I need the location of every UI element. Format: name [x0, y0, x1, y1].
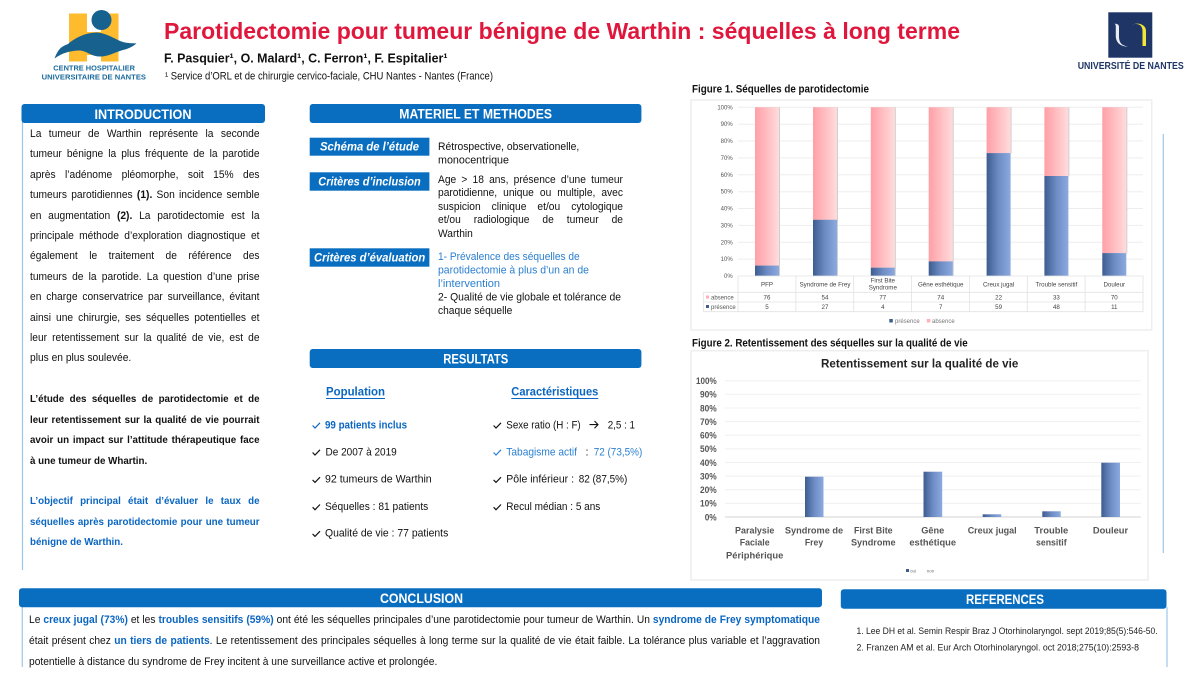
affiliation: ¹ Service d’ORL et de chirurgie cervico-faciale, CHU Nantes - Nantes (France): [165, 70, 493, 82]
list: caracteristiques: 2,5 : 1: [608, 419, 635, 431]
data table: absence: [711, 296, 734, 302]
panel: materiel et methodes: Critères d’évaluation: [314, 251, 425, 265]
y axis labels: 60%: [721, 173, 733, 179]
legend: [906, 568, 935, 574]
data table: Syndrome de Frey: [800, 282, 851, 288]
panel: references: 2. Franzen AM et al. Eur Arch Otorhinolaryngol. oct 2018;275(10):2593-8: [856, 643, 1139, 653]
logo: Université de Nantes: [1078, 12, 1184, 72]
panel: conclusion: potentielle à distance du syndrome de Frey incitent à une surveillance active et prolongée.: [29, 656, 437, 668]
panel: introduction: principale méthode d’exploration diagnostique et: [30, 230, 260, 242]
y axis labels: 50%: [700, 443, 717, 454]
list: caracteristiques: Sexe ratio (H : F): [506, 419, 581, 431]
logo: Université de Nantes: UNIVERSITÉ DE NANTES: [1078, 60, 1184, 72]
y axis labels: 30%: [721, 223, 733, 229]
data table: 70: [1111, 294, 1118, 302]
logo: Centre Hospitalier Universitaire de Nantes: CENTRE HOSPITALIER: [53, 64, 135, 73]
category labels: Périphérique: [726, 550, 783, 561]
category labels: esthétique: [909, 538, 956, 549]
panel: introduction: également le traitement de référence des: [30, 250, 260, 262]
category labels: Gêne: [921, 525, 944, 536]
panel: materiel et methodes: Age > 18 ans, présence d’une tumeur: [438, 174, 623, 186]
panel: materiel et methodes: suspicion clinique et/ou cytologique: [438, 200, 623, 212]
panel: introduction: INTRODUCTION: [94, 107, 192, 122]
panel: references: [841, 589, 1167, 667]
list: population: Qualité de vie : 77 patients: [325, 528, 449, 540]
y axis labels: 0%: [705, 511, 717, 522]
bars: [755, 107, 1127, 276]
data table: 59: [995, 304, 1003, 311]
y axis labels: 30%: [700, 470, 717, 481]
panel: introduction: tumeur bénigne la plus fréquente de la parotide: [30, 148, 260, 160]
title: Parotidectomie pour tumeur bénigne de Warthin : séquelles à long terme: [164, 18, 960, 44]
bars: [805, 463, 1120, 517]
panel: introduction: tumeurs parotidiennes (1). Son incidence semble: [30, 189, 260, 201]
data table: [703, 276, 1143, 312]
panel: resultats: [310, 349, 642, 540]
panel: conclusion: [19, 588, 822, 673]
panel: introduction: avoir un impact sur l’attitude thérapeutique face: [30, 434, 260, 446]
panel: conclusion: Le creux jugal (73%) et les troubles sensitifs (59%) ont été les séquelles principales d’une parotidectomie pour tumeur de Warthin. Un syndrome de Frey symptomatique: [29, 614, 820, 626]
panel: introduction: leur retentissement sur la qualité de vie pourrait: [30, 414, 260, 426]
panel: introduction: La tumeur de Warthin représente la seconde: [30, 128, 260, 140]
data table: PFP: [761, 282, 773, 288]
data table: Creux jugal: [983, 282, 1014, 288]
panel: introduction: L’objectif principal était d’évaluer le taux de: [30, 495, 260, 507]
panel: materiel et methodes: Critères d’inclusion: [318, 175, 421, 189]
data table: présence: [711, 305, 736, 311]
panel: introduction: en augmentation (2). La parotidectomie est la: [30, 210, 260, 222]
list: caracteristiques: Pôle inférieur :: [506, 474, 574, 486]
panel: introduction: bénigne de Warthin.: [30, 536, 123, 548]
y axis labels: 40%: [721, 206, 733, 212]
panel: introduction: plus en plus soulevée.: [30, 352, 131, 364]
data table: 7: [939, 304, 943, 311]
figure 2 heading: Figure 2. Retentissement des séquelles sur la qualité de vie: [692, 337, 968, 349]
category labels: Douleur: [1093, 525, 1128, 536]
list: caracteristiques: Recul médian : 5 ans: [506, 501, 601, 513]
data table: 27: [822, 304, 829, 311]
y axis labels: 70%: [721, 156, 733, 162]
y axis labels: 80%: [721, 139, 733, 145]
data table: 22: [995, 294, 1003, 302]
panel: materiel et methodes: Warthin: [438, 228, 473, 240]
list: population: Population: [326, 385, 385, 399]
y axis labels: 100%: [696, 375, 717, 386]
y axis labels: 20%: [721, 240, 733, 246]
data table: 4: [881, 304, 885, 311]
panel: materiel et methodes: MATERIEL ET METHODES: [399, 107, 552, 122]
figure 1 heading: Figure 1. Séquelles de parotidectomie: [692, 84, 869, 96]
y axis labels: 80%: [700, 402, 717, 413]
y axis labels: 100%: [717, 105, 733, 111]
category labels: Faciale: [740, 538, 770, 549]
panel: resultats: RESULTATS: [443, 352, 508, 366]
panel: conclusion: CONCLUSION: [380, 591, 463, 606]
category labels: Frey: [805, 538, 824, 549]
data table: Trouble sensitif: [1036, 282, 1078, 288]
legend: non: [927, 568, 935, 574]
panel: introduction: leur retentissement sur la qualité de vie, est de: [30, 332, 260, 344]
category labels: Paralysie: [735, 525, 774, 536]
panel: materiel et methodes: 2- Qualité de vie globale et tolérance de: [438, 292, 621, 304]
panel: references: REFERENCES: [966, 592, 1044, 607]
data table: 77: [879, 294, 887, 302]
list: population: Séquelles : 81 patients: [325, 501, 429, 513]
y axis labels: 60%: [700, 430, 717, 440]
y axis labels: 90%: [721, 122, 733, 128]
y axis labels: 10%: [721, 257, 733, 263]
data table: Gêne esthétique: [918, 282, 964, 288]
list: caracteristiques: 82 (87,5%): [579, 474, 627, 486]
panel: materiel et methodes: monocentrique: [438, 155, 509, 167]
category labels: First Bite: [854, 525, 893, 536]
panel: introduction: en charge conservatrice par surveillance, évitant: [30, 291, 260, 303]
panel: materiel et methodes: 1- Prévalence des séquelles de: [438, 251, 580, 263]
divider: right column rule: [1162, 134, 1164, 553]
panel: materiel et methodes: chaque séquelle: [438, 305, 512, 317]
y axis labels: 20%: [700, 484, 717, 495]
panel: materiel et methodes: parotidectomie à plus d’un an de: [438, 264, 589, 276]
data table: 54: [822, 294, 829, 302]
y axis labels: 0%: [724, 274, 733, 280]
panel: materiel et methodes: [310, 104, 641, 317]
data table: 33: [1053, 294, 1060, 302]
panel: conclusion: était présent chez un tiers de patients. Le retentissement des principales séquelles à long terme sur la qualité de vie était faible. La tolérance plus variable et l’aggravation: [29, 635, 820, 647]
chart: figure 2 bars: [691, 351, 1148, 580]
y axis labels: 90%: [700, 389, 717, 400]
category labels: sensitif: [1036, 538, 1067, 549]
data table: 76: [764, 294, 771, 302]
data table: Douleur: [1103, 282, 1125, 288]
panel: introduction: [22, 104, 265, 570]
y axis labels: 50%: [721, 190, 733, 196]
panel: materiel et methodes: et/ou radiologique de tumeur de: [438, 214, 623, 226]
data table: 48: [1053, 304, 1060, 311]
logo: Centre Hospitalier Universitaire de Nantes: UNIVERSITAIRE DE NANTES: [42, 72, 146, 81]
list: caracteristiques: Caractéristiques: [511, 385, 599, 399]
logo: Centre Hospitalier Universitaire de Nantes: [42, 10, 146, 81]
legend: [889, 319, 955, 325]
panel: materiel et methodes: Rétrospective, observationelle,: [438, 141, 579, 153]
y axis labels: 10%: [700, 498, 717, 509]
category labels: Syndrome de: [785, 525, 843, 536]
y axis labels: [717, 105, 733, 280]
data table: Syndrome: [869, 284, 897, 292]
list: population: 92 tumeurs de Warthin: [325, 474, 432, 486]
panel: introduction: séquelles après parotidectomie pour une tumeur: [30, 516, 260, 528]
panel: materiel et methodes: l’intervention: [438, 278, 500, 290]
legend: présence: [895, 319, 920, 325]
panel: introduction: L’étude des séquelles de parotidectomie et de: [30, 393, 260, 405]
category labels: [726, 525, 1128, 561]
panel: introduction: ainsi une chirurgie, ses séquelles potentielles et: [30, 312, 260, 324]
data table: 11: [1111, 304, 1118, 311]
legend: oui: [910, 568, 916, 574]
y axis labels: [696, 375, 717, 522]
list: caracteristiques: [494, 385, 642, 513]
list: population: 99 patients inclus: [325, 419, 407, 431]
legend: absence: [932, 319, 955, 325]
data table: First Bite: [871, 278, 896, 284]
data table: 74: [937, 294, 945, 302]
list: caracteristiques: :: [586, 446, 589, 458]
panel: materiel et methodes: parotidienne, unique ou multiple, avec: [438, 187, 623, 199]
category labels: Trouble: [1034, 525, 1068, 536]
y axis labels: 70%: [700, 416, 717, 427]
category labels: Creux jugal: [968, 525, 1017, 536]
panel: introduction: à une tumeur de Whartin.: [30, 454, 147, 466]
list: caracteristiques: Tabagisme actif: [506, 446, 578, 458]
list: population: De 2007 à 2019: [326, 446, 397, 458]
panel: introduction: après l’adénome pléomorphe, soit 15% des: [30, 169, 260, 181]
authors: F. Pasquier¹, O. Malard¹, C. Ferron¹, F. Espitalier¹: [164, 52, 448, 66]
panel: introduction: tumeurs de la parotide. La question d’une prise: [30, 271, 260, 283]
chart title: Retentissement sur la qualité de vie: [821, 357, 1019, 371]
category labels: Syndrome: [851, 538, 896, 549]
list: population: [313, 385, 449, 540]
panel: references: 1. Lee DH et al. Semin Respir Braz J Otorhinolaryngol. sept 2019;85(5):546-50.: [856, 626, 1158, 636]
y axis labels: 40%: [700, 457, 717, 468]
chart: figure 1 stacked bars: [691, 100, 1152, 330]
panel: materiel et methodes: Schéma de l’étude: [320, 140, 419, 154]
data table: 5: [765, 304, 769, 311]
list: caracteristiques: 72 (73,5%): [594, 446, 642, 458]
